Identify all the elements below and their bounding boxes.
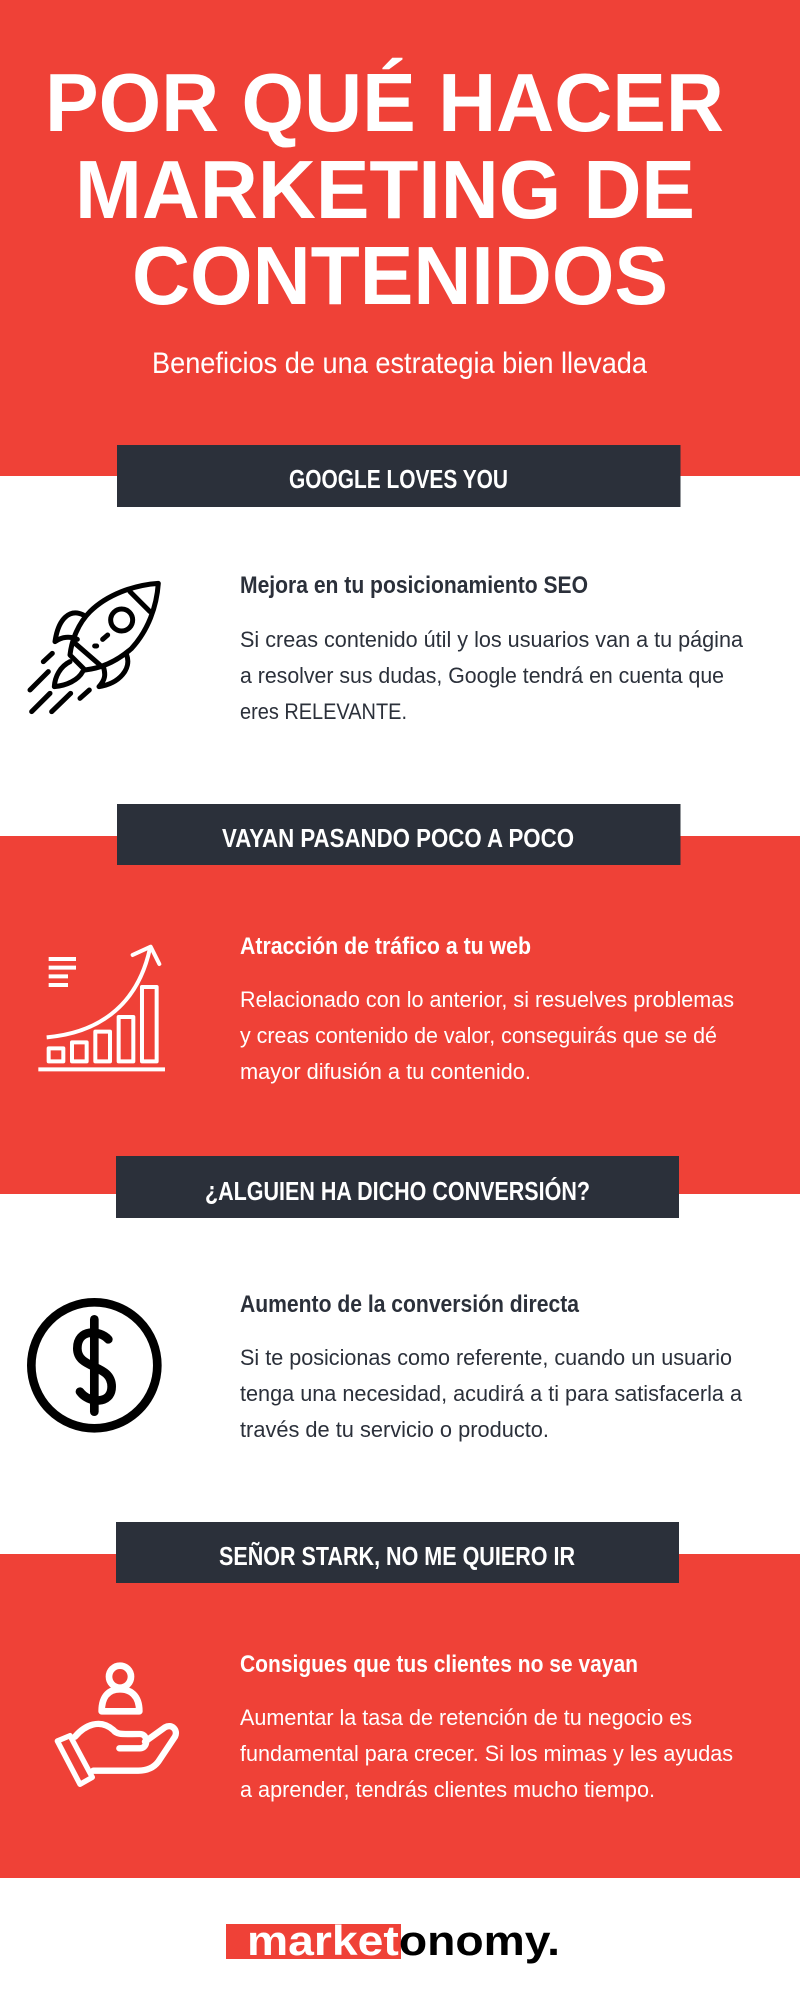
banner: señor stark [116,1522,679,1583]
title: POR QUÉ HACER [45,56,724,149]
body text: conversión: tenga una necesidad, acudirá a ti para satisfacerla a [240,1381,742,1406]
title: CONTENIDOS [132,229,668,322]
body text: conversión: través de tu servicio o producto. [240,1417,549,1442]
banner: señor stark: SEÑOR STARK, NO ME QUIERO IR [219,1541,575,1571]
icon: dollar coin [31,1302,157,1428]
body text: retención: Aumentar la tasa de retención de tu negocio es [240,1705,692,1730]
banner: google loves you [117,445,680,507]
icon: rocket [30,583,158,712]
banner: google loves you: GOOGLE LOVES YOU [289,466,508,494]
body text: tráfico: y creas contenido de valor, conseguirás que se dé [240,1023,717,1048]
panel: google loves you [0,445,800,836]
panel: conversión [0,1156,800,1554]
body text: retención: a aprender, tendrás clientes mucho tiempo. [240,1777,655,1802]
body text: retención [240,1705,733,1802]
body text: SEO: a resolver sus dudas, Google tendrá en cuenta que [240,663,724,688]
heading: conversión: Aumento de la conversión directa [240,1291,580,1318]
panel: retención [0,1522,800,1878]
footer logo: marketonomy: market onomy. [247,1917,560,1964]
body text: SEO [240,627,743,724]
body text: SEO: eres RELEVANTE. [240,699,407,724]
body text: tráfico: Relacionado con lo anterior, si resuelves problemas [240,987,734,1012]
heading: tráfico: Atracción de tráfico a tu web [240,933,531,960]
body text: conversión [240,1345,742,1442]
body text: tráfico: mayor difusión a tu contenido. [240,1059,531,1084]
body text: conversión: Si te posicionas como referente, cuando un usuario [240,1345,732,1370]
banner: vayan pasando [117,804,680,865]
banner: conversión [116,1156,679,1218]
banner: conversión: ¿ALGUIEN HA DICHO CONVERSIÓN? [205,1176,590,1206]
body text: retención: fundamental para crecer. Si los mimas y les ayudas [240,1741,733,1766]
subtitle: Beneficios de una estrategia bien llevada [152,347,647,380]
heading: SEO: Mejora en tu posicionamiento SEO [240,572,588,599]
heading: retención: Consigues que tus clientes no se vayan [240,1651,638,1678]
icon: hand holding person [57,1666,176,1784]
icon: growth chart [38,947,165,1069]
body text: tráfico [240,987,734,1084]
panel: header [0,0,800,476]
panel: tráfico [0,804,800,1194]
title: MARKETING DE [75,143,695,236]
body text: SEO: Si creas contenido útil y los usuarios van a tu página [240,627,743,652]
banner: vayan pasando: VAYAN PASANDO POCO A POCO [222,825,574,853]
title [45,56,724,322]
